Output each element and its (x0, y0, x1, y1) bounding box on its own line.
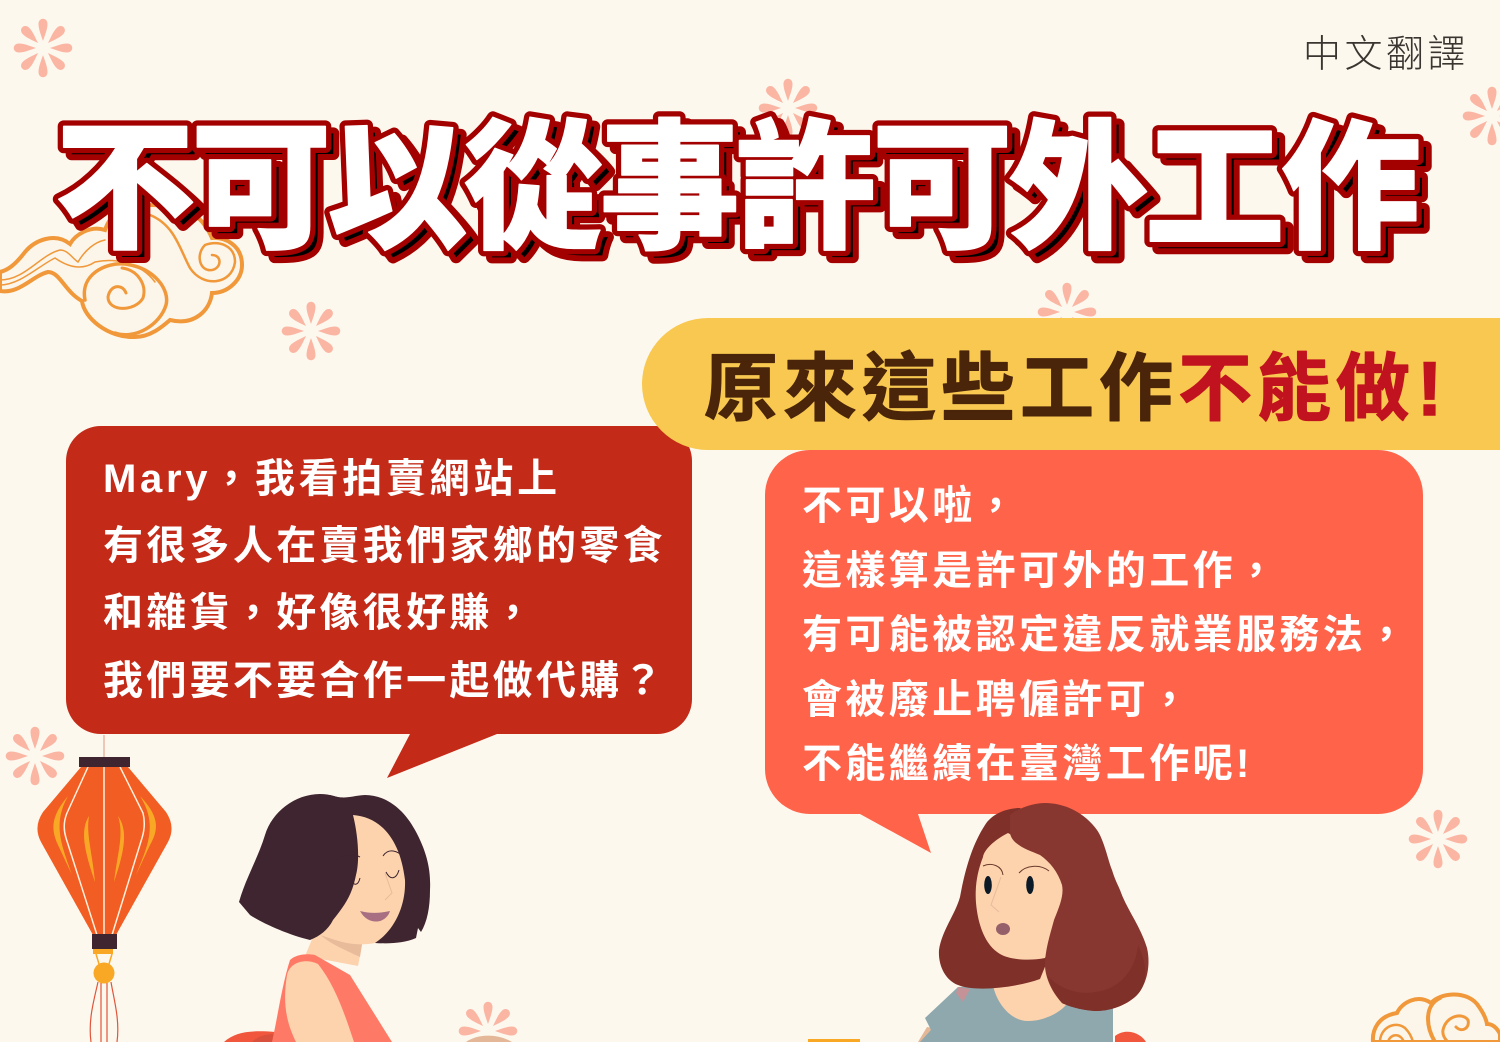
decorative flower above yellow banner (1038, 283, 1096, 341)
bubble text: 不可以啦， (802, 484, 1019, 528)
decorative flower top right (1463, 87, 1500, 145)
bubble text: 和雜貨，好像很好賺， (103, 591, 536, 635)
icon: orange cloud bottom right (1373, 994, 1500, 1042)
decorative flower below cloud (282, 302, 340, 360)
decorative flower bottom centre (459, 1002, 517, 1042)
decorative flower left of lantern (6, 727, 64, 785)
decorative flower right side (1409, 810, 1467, 868)
bubble text: 我們要不要合作一起做代購？ (103, 659, 666, 703)
bubble text (802, 484, 1410, 786)
bubble text: 有很多人在賣我們家鄉的零食 (103, 524, 666, 568)
icon: red lantern (37, 735, 172, 1042)
speech bubble: Mary (765, 450, 1423, 853)
decorative flower top left (14, 19, 72, 77)
icon: orange cloud left (0, 204, 242, 337)
label: Chinese translation: 中文翻譯 (1303, 23, 1469, 78)
banner heading: 原來這些工作不能做 (704, 347, 1415, 430)
bubble text: 會被廢止聘僱許可， (802, 678, 1193, 722)
bubble text: Mary，我看拍賣網站上 (103, 457, 561, 501)
decorative flower top centre (759, 79, 817, 137)
character: woman with short dark hair (224, 794, 430, 1042)
banner exclamation mark: ! (1417, 347, 1442, 432)
title: shadow, outline and white face: 不可以從事許可外工作 (55, 110, 1418, 267)
bubble text: 這樣算是許可外的工作， (802, 549, 1279, 593)
bubble text: 不能繼續在臺灣工作呢! (802, 742, 1253, 786)
character: woman with long brown hair (918, 803, 1149, 1042)
yellow banner (642, 318, 1500, 450)
bubble text (103, 457, 666, 703)
title: shadow, outline and white face: 不可以從事許可外工作 (63, 117, 1426, 274)
gold object at bottom (808, 1039, 860, 1042)
tan object at bottom (466, 1036, 512, 1042)
title: shadow, outline and white face: 不可以從事許可外工作 (55, 110, 1418, 267)
bubble text: 有可能被認定違反就業服務法， (802, 613, 1410, 657)
speech bubble: Mary's friend (66, 426, 692, 778)
